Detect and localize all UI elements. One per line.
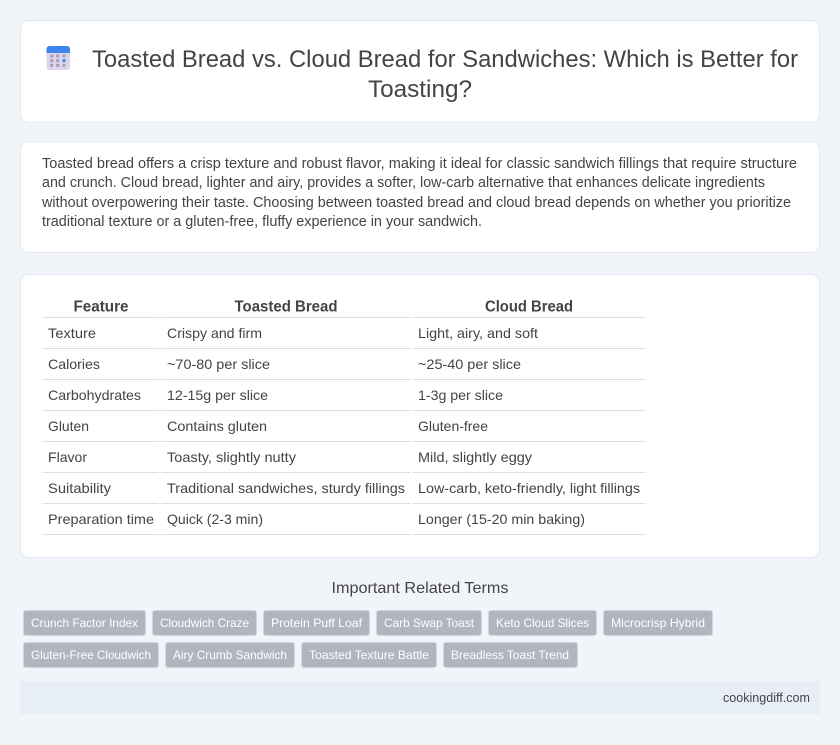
tags: related terms: Microcrisp Hybrid <box>611 616 705 630</box>
row: gluten: Gluten <box>48 418 89 434</box>
row: calories: ~70-80 per slice <box>167 356 270 372</box>
text block: introduction: and crunch. Cloud bread, lighter and airy, provides a softer, low-carb alternative that enhances delicate ingredients <box>42 175 765 191</box>
panel: comparison table <box>20 274 820 558</box>
tags: related terms: Keto Cloud Slices <box>496 616 589 630</box>
tags: related terms: Airy Crumb Sandwich <box>173 648 287 662</box>
row: flavor: Flavor <box>48 449 87 465</box>
heading: related terms: Important Related Terms <box>332 580 508 597</box>
icon: calendar <box>46 46 70 70</box>
text block: introduction: without overpowering their taste. Choosing between toasted bread and cloud bread depends on whether you prioritize <box>41 195 791 211</box>
row: flavor: Toasty, slightly nutty <box>167 449 296 465</box>
row: flavor: Mild, slightly eggy <box>418 449 532 465</box>
row: texture <box>48 325 538 341</box>
text block: introduction: traditional texture or a gluten-free, fluffy experience in your sandwich. <box>42 214 482 230</box>
footer <box>20 681 820 714</box>
table header: Cloud Bread <box>485 298 573 316</box>
text block: introduction <box>41 156 797 230</box>
row: gluten: Gluten-free <box>418 418 488 434</box>
tags: related terms <box>24 610 712 668</box>
row: preparation time <box>48 511 585 527</box>
row: calories: Calories <box>48 356 100 372</box>
panel: title header <box>20 20 820 122</box>
tags: related terms: Breadless Toast Trend <box>451 648 569 662</box>
title: Toasting? <box>368 76 472 103</box>
row: suitability: Low-carb, keto-friendly, light fillings <box>418 480 640 496</box>
table header <box>74 298 573 316</box>
title <box>92 46 798 103</box>
tags: related terms: Toasted Texture Battle <box>309 648 429 662</box>
footer: cookingdiff.com <box>723 691 810 705</box>
tags: related terms: Gluten-Free Cloudwich <box>31 648 151 662</box>
row: calories: ~25-40 per slice <box>418 356 521 372</box>
row: suitability <box>48 480 640 496</box>
row: suitability: Traditional sandwiches, sturdy fillings <box>167 480 405 496</box>
table header: Toasted Bread <box>234 298 338 316</box>
tags: related terms: Carb Swap Toast <box>384 616 475 630</box>
row: preparation time: Longer (15-20 min baking) <box>418 511 585 527</box>
panel: introduction <box>20 142 820 252</box>
row: carbohydrates <box>48 387 503 403</box>
tags: related terms: Crunch Factor Index <box>31 616 138 630</box>
row: calories <box>48 356 521 372</box>
text block: introduction: Toasted bread offers a crisp texture and robust flavor, making it ideal for classic sandwich fillings that require structure <box>42 156 797 172</box>
tags: related terms: Cloudwich Craze <box>160 616 249 630</box>
row: preparation time: Preparation time <box>48 511 154 527</box>
table header: Feature <box>74 298 129 316</box>
row: carbohydrates: 1-3g per slice <box>418 387 503 403</box>
row: gluten: Contains gluten <box>167 418 267 434</box>
row: carbohydrates: 12-15g per slice <box>167 387 268 403</box>
row: texture: Crispy and firm <box>167 325 262 341</box>
tags: related terms: Protein Puff Loaf <box>271 616 363 630</box>
row: carbohydrates: Carbohydrates <box>48 387 141 403</box>
title: Toasted Bread vs. Cloud Bread for Sandwiches: Which is Better for <box>92 46 798 73</box>
row: preparation time: Quick (2-3 min) <box>167 511 263 527</box>
row: flavor <box>48 449 532 465</box>
row: texture: Texture <box>48 325 96 341</box>
row: gluten <box>48 418 488 434</box>
row: texture: Light, airy, and soft <box>418 325 538 341</box>
row: suitability: Suitability <box>48 480 111 496</box>
